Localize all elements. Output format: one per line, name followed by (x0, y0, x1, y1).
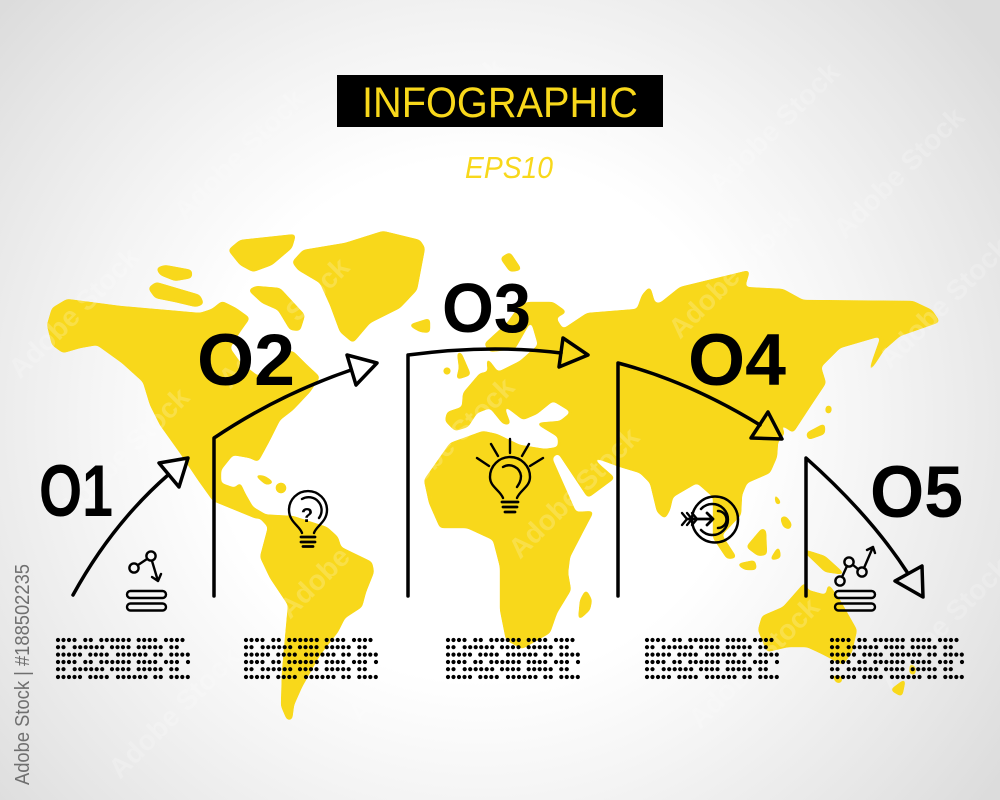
icon: question bulb (289, 491, 327, 546)
watermark pattern: Adobe Stock (2, 241, 146, 384)
map: indonesia 1 (780, 516, 792, 530)
map: sakhalin (825, 405, 832, 414)
map: japan (806, 423, 825, 440)
text block 3 (448, 640, 578, 677)
text block 1 (58, 640, 188, 677)
map: baffin island (248, 286, 305, 331)
map: indonesia 3 (769, 545, 781, 561)
watermark pattern: Adobe Stock (682, 591, 826, 734)
map: indonesia 2 (746, 528, 767, 556)
map: cuba (253, 474, 275, 485)
map: tasmania (832, 675, 842, 683)
text block 4 (647, 640, 777, 677)
map: svalbard (500, 252, 522, 272)
watermark pattern: Adobe Stock (167, 83, 311, 226)
arrow 2 (214, 355, 377, 596)
arrow 4 (618, 363, 782, 596)
icon: question bulb: ? (301, 505, 313, 527)
number 05: O5 (870, 452, 963, 533)
number 03: O3 (442, 269, 531, 347)
icon: target with arrow (682, 496, 738, 542)
title text: INFOGRAPHIC (362, 79, 638, 127)
arrow 5 (806, 458, 923, 597)
subtitle: EPS10 (465, 150, 553, 185)
map: australia (758, 582, 857, 665)
map: madagascar (578, 589, 592, 621)
map: small arctic island (156, 265, 192, 281)
watermark pattern: Adobe Stock (827, 101, 971, 244)
watermark pattern: Adobe Stock (497, 91, 641, 234)
map: sri lanka (669, 520, 675, 530)
map: indonesia sliver (773, 490, 782, 505)
map: new zealand (890, 678, 906, 697)
map: south america (256, 514, 374, 720)
icon: network arrow with bars (127, 551, 166, 610)
number 04: O4 (688, 320, 786, 401)
icon: light bulb with rays (477, 439, 543, 512)
map: eurasia and africa (424, 270, 940, 649)
map: greenland (292, 231, 425, 343)
map: britain (456, 352, 471, 380)
title banner (337, 75, 663, 127)
text block 5 (832, 640, 962, 677)
map: new guinea (800, 548, 846, 575)
map: iceland (408, 318, 430, 333)
watermark pattern: Adobe Stock (702, 56, 846, 199)
watermark pattern: Adobe Stock (662, 201, 806, 344)
watermark pattern: Adobe Stock (342, 586, 486, 729)
map: caribbean island (276, 482, 286, 494)
watermark pattern: Adobe Stock (502, 421, 646, 564)
watermark pattern: Adobe Stock (212, 251, 356, 394)
number 01: O1 (39, 451, 113, 532)
watermark pattern: Adobe Stock (367, 51, 511, 194)
watermark pattern: Adobe Stock (272, 481, 416, 624)
text block 2 (246, 640, 376, 677)
watermark pattern: Adobe Stock (52, 381, 196, 524)
watermark pattern: Adobe Stock (377, 371, 521, 514)
watermark pattern: Adobe Stock (552, 551, 696, 694)
arrow 3 (408, 338, 588, 596)
icon: growth chart with bars (835, 547, 875, 610)
world map (47, 231, 940, 720)
map: arctic island large (228, 234, 296, 272)
number 02: O2 (197, 320, 295, 401)
stock id label: Adobe Stock | #188502235 (12, 564, 34, 785)
map: small arctic island 2 (148, 282, 204, 307)
arrow 1 (73, 458, 188, 595)
map: small pacific island (909, 662, 916, 676)
map: ireland (443, 367, 451, 375)
map: north america (47, 299, 320, 519)
map: indonesia 4 (736, 560, 757, 570)
watermark pattern: Adobe Stock (102, 641, 246, 784)
